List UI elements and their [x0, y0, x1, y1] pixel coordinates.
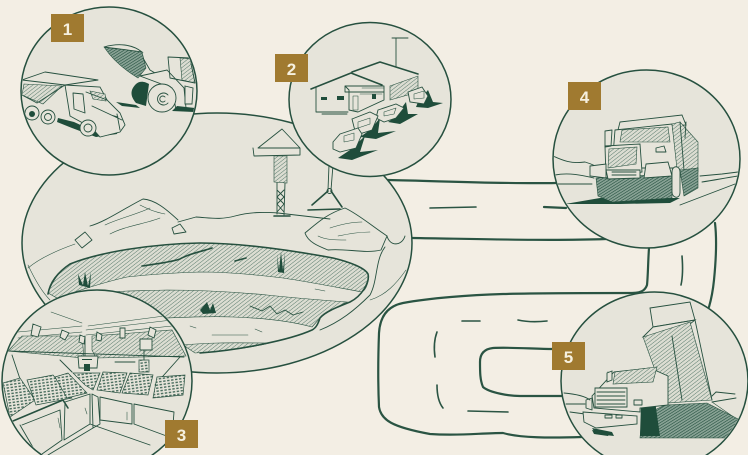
icon: antenna	[392, 38, 408, 66]
panel: loading at the pit	[21, 7, 197, 175]
icon: spilled load and shadow	[592, 399, 740, 438]
icon: dump truck	[22, 72, 125, 137]
icon: parked trucks	[333, 87, 443, 160]
badge 4: 4	[580, 88, 590, 107]
panel: maintenance workshop and truck fleet	[289, 22, 451, 176]
ceiling lights	[31, 324, 156, 344]
panel: loaded truck on the haul road	[553, 70, 740, 248]
badge 5: 5	[564, 348, 573, 367]
icon: wheel loader	[104, 45, 195, 112]
mounds and terrain	[28, 199, 406, 330]
pit	[48, 243, 369, 353]
haul road	[378, 180, 716, 438]
icon: raised tipper body	[643, 302, 712, 403]
icon: truck cab	[583, 367, 668, 436]
landscape	[564, 392, 738, 425]
badge 3: 3	[177, 426, 186, 445]
badge 1	[51, 14, 84, 42]
badge 2	[275, 54, 308, 82]
panel: truck tipping at the dump	[561, 292, 748, 455]
badge 1: 1	[63, 20, 72, 39]
cabinets	[20, 394, 174, 455]
landscape	[553, 156, 738, 205]
icon: workshop building	[311, 62, 418, 114]
crane	[253, 129, 342, 216]
ceiling and hatched window band	[8, 312, 186, 358]
panel: open pit mine with crane	[22, 113, 412, 373]
badge 4	[568, 82, 601, 110]
control desks	[3, 372, 185, 421]
panel: control room	[2, 290, 192, 455]
badge 2: 2	[287, 60, 296, 79]
icon: dump truck front view	[590, 115, 698, 202]
badge 5	[552, 342, 585, 370]
badge 3	[165, 420, 198, 448]
monitor and panels	[12, 336, 180, 385]
